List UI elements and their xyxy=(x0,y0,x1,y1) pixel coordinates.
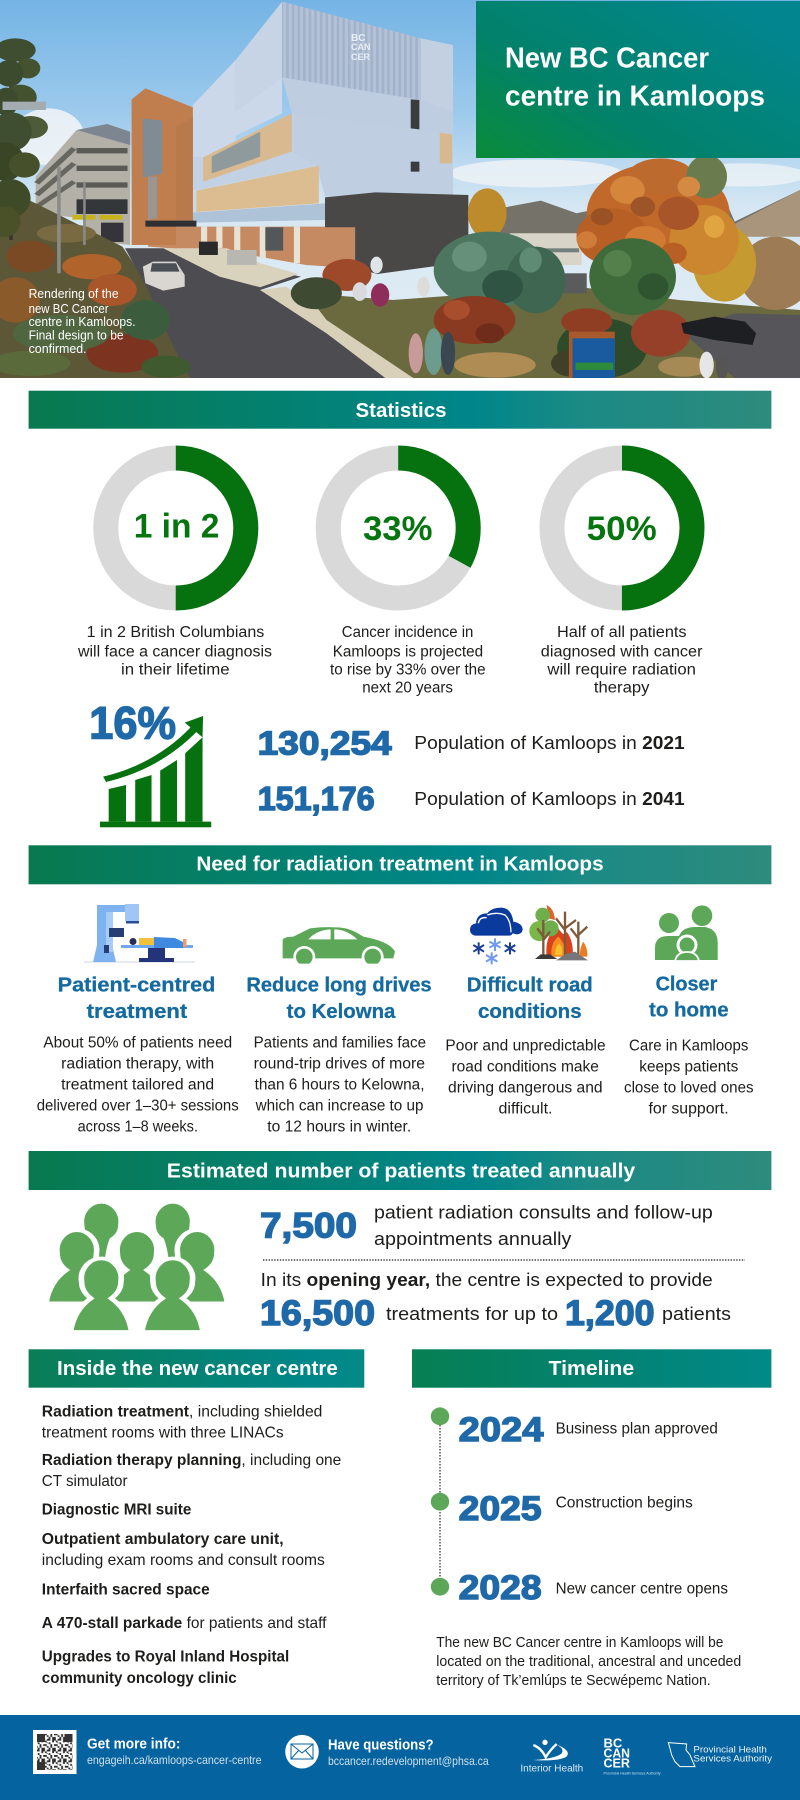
grey parkade building xyxy=(36,124,130,245)
donut: 50%: 50% xyxy=(587,510,657,548)
land acknowledgement: territory of Tk’emlúps te Secwépemc Nation. xyxy=(436,1672,711,1689)
heading: timeline xyxy=(412,1349,771,1388)
heading: estimated patients: Estimated number of patients treated annually xyxy=(167,1159,636,1182)
logo: BC Cancer: CER xyxy=(604,1757,630,1771)
donut: 33% xyxy=(328,458,468,598)
timeline 2024: Business plan approved xyxy=(556,1420,718,1437)
building signage: CER xyxy=(351,52,371,62)
list: facilities: Radiation therapy planning, including one xyxy=(42,1452,341,1469)
column text: closer to home: keeps patients xyxy=(639,1059,739,1076)
donut: 1 in 2 xyxy=(106,458,246,598)
stat: 7,500 consults: 7,500 xyxy=(260,1206,357,1245)
people xyxy=(353,257,728,380)
column text: patient-centred treatment: treatment tailored and xyxy=(61,1077,214,1094)
timeline 2028: New cancer centre opens xyxy=(556,1580,728,1597)
hero photo: rendering of the new cancer centre xyxy=(0,0,800,380)
timeline 2024: 2024 xyxy=(459,1411,543,1449)
photo caption: Rendering of the xyxy=(29,287,119,301)
logo: BC Cancer: BC xyxy=(604,1736,623,1751)
column text: reduce long drives xyxy=(254,1034,426,1136)
opening year sentence: In its opening year, the centre is expected to provide xyxy=(261,1269,713,1290)
logo: BC Cancer: Provincial Health Services Authority xyxy=(604,1772,661,1776)
column text: closer to home: Care in Kamloops xyxy=(629,1038,749,1055)
caption: 33% xyxy=(330,624,486,697)
wayfinding sign xyxy=(569,332,615,378)
icon: group of people xyxy=(46,1202,228,1332)
icon: rising bar chart with arrow xyxy=(100,716,211,827)
heading: statistics: Statistics xyxy=(356,399,446,422)
16% growth figure: 16% xyxy=(89,697,176,748)
heading: need for radiation treatment xyxy=(29,845,771,884)
list: facilities: community oncology clinic xyxy=(42,1670,237,1687)
photo caption: new BC Cancer xyxy=(29,302,109,316)
column heading: closer to home: Closer xyxy=(656,974,718,996)
icon: radiation machine and patient xyxy=(84,904,195,962)
land acknowledgement xyxy=(436,1634,741,1689)
QR code xyxy=(33,1730,76,1774)
list: facilities: Radiation treatment, including shielded xyxy=(42,1404,322,1421)
timeline 2028 xyxy=(459,1569,728,1607)
column text: difficult road conditions xyxy=(445,1038,606,1118)
list: facilities: A 470-stall parkade for patients and staff xyxy=(42,1615,327,1632)
column text: reduce long drives: Patients and families face xyxy=(254,1034,426,1051)
logo: BC Cancer: CAN xyxy=(604,1747,630,1761)
caption: 1 in 2: 1 in 2 British Columbians xyxy=(87,624,265,641)
stat: 7,500 consults: appointments annually xyxy=(374,1228,572,1249)
icon: wildfire xyxy=(529,905,588,960)
stat: 16,500 treatments for 1,200 patients: 16,500 xyxy=(260,1294,375,1333)
photo caption: centre in Kamloops. xyxy=(29,315,136,329)
heading: inside the new cancer centre xyxy=(29,1349,364,1388)
population 2021 xyxy=(258,724,685,761)
column text: patient-centred treatment: radiation therapy, with xyxy=(61,1056,214,1073)
donut: 1 in 2: 1 in 2 xyxy=(134,508,219,546)
stat: 16,500 treatments for 1,200 patients: patients xyxy=(662,1303,731,1324)
caption: 50%: diagnosed with cancer xyxy=(541,644,702,661)
column heading: difficult road conditions: Difficult road xyxy=(467,975,593,997)
photo caption: confirmed. xyxy=(29,342,87,356)
caption: 1 in 2: will face a cancer diagnosis xyxy=(77,644,272,661)
have questions xyxy=(328,1736,489,1768)
caption: 33%: to rise by 33% over the xyxy=(330,662,486,679)
timeline 2025 xyxy=(459,1490,693,1528)
column heading: patient-centred treatment: Patient-centred xyxy=(58,975,215,997)
column text: reduce long drives: than 6 hours to Kelowna, xyxy=(255,1077,424,1094)
icon: car xyxy=(283,927,395,968)
column text: closer to home: for support. xyxy=(648,1101,729,1118)
column heading: closer to home: to home xyxy=(649,1000,729,1022)
logo: Provincial Health Services Authority: Provincial Health xyxy=(693,1745,767,1756)
column heading: reduce long drives: Reduce long drives xyxy=(246,975,432,997)
heading: need for radiation treatment: Need for radiation treatment in Kamloops xyxy=(196,853,604,876)
timeline 2024 xyxy=(459,1411,718,1449)
population 2021: Population of Kamloops in 2021 xyxy=(414,732,685,753)
column heading: reduce long drives xyxy=(246,975,432,1023)
title panel: New BC Cancer xyxy=(505,43,709,75)
building signage xyxy=(351,34,370,60)
column text: patient-centred treatment xyxy=(37,1034,239,1136)
have questions: bccancer.redevelopment@phsa.ca xyxy=(328,1754,489,1768)
column text: patient-centred treatment: About 50% of patients need xyxy=(43,1034,232,1051)
list: facilities: CT simulator xyxy=(42,1473,128,1490)
heading: estimated patients xyxy=(29,1151,771,1190)
get more info: engageih.ca/kamloops-cancer-centre xyxy=(87,1753,262,1767)
cars xyxy=(143,242,756,345)
column heading: difficult road conditions: conditions xyxy=(478,1001,582,1023)
column heading: patient-centred treatment xyxy=(58,975,215,1023)
caption: 50%: therapy xyxy=(594,680,650,697)
have questions: Have questions? xyxy=(328,1736,434,1753)
icon: family xyxy=(655,905,718,961)
list: facilities: Upgrades to Royal Inland Hospital xyxy=(42,1649,289,1666)
building volumes xyxy=(193,2,453,223)
heading: inside the new cancer centre: Inside the new cancer centre xyxy=(57,1357,338,1380)
title panel: centre in Kamloops xyxy=(505,80,765,112)
stat: 16,500 treatments for 1,200 patients: 1,200 xyxy=(565,1294,654,1333)
column text: difficult road conditions: difficult. xyxy=(498,1101,552,1118)
population 2041: Population of Kamloops in 2041 xyxy=(414,788,685,809)
copper tower xyxy=(132,88,196,245)
get more info: Get more info: xyxy=(87,1735,180,1752)
column text: reduce long drives: which can increase to up xyxy=(255,1098,424,1115)
stat: 7,500 consults xyxy=(260,1201,713,1249)
heading: statistics xyxy=(29,391,771,429)
building signage: BC xyxy=(351,33,365,44)
column heading: closer to home xyxy=(649,974,729,1022)
trees and planting xyxy=(0,155,800,378)
column text: closer to home xyxy=(624,1038,754,1118)
population 2041 xyxy=(258,780,685,817)
left pine tree xyxy=(0,38,86,273)
population 2041: 151,176 xyxy=(258,780,375,817)
timeline 2025: Construction begins xyxy=(556,1494,693,1511)
logo: Provincial Health Services Authority xyxy=(668,1743,772,1767)
column text: difficult road conditions: road conditions make xyxy=(452,1059,599,1076)
column text: closer to home: close to loved ones xyxy=(624,1080,754,1097)
stat: 16,500 treatments for 1,200 patients xyxy=(260,1294,731,1333)
column text: difficult road conditions: driving dangerous and xyxy=(448,1080,603,1097)
land acknowledgement: located on the traditional, ancestral and unceded xyxy=(436,1653,741,1670)
caption: 33%: Cancer incidence in xyxy=(342,624,473,641)
column heading: reduce long drives: to Kelowna xyxy=(287,1001,396,1023)
list: facilities: Outpatient ambulatory care unit, xyxy=(42,1531,284,1548)
caption: 1 in 2 xyxy=(77,624,272,679)
land acknowledgement: The new BC Cancer centre in Kamloops will be xyxy=(436,1634,723,1651)
timeline 2028: 2028 xyxy=(459,1569,542,1607)
caption: 33%: next 20 years xyxy=(362,680,453,697)
get more info xyxy=(87,1735,262,1767)
column heading: patient-centred treatment: treatment xyxy=(87,1001,188,1023)
column text: difficult road conditions: Poor and unpredictable xyxy=(445,1038,606,1055)
footer band xyxy=(0,1715,800,1800)
column text: reduce long drives: to 12 hours in winter. xyxy=(267,1119,411,1136)
caption: 50% xyxy=(541,624,702,697)
caption: 50%: will require radiation xyxy=(546,662,696,679)
list: facilities: Interfaith sacred space xyxy=(42,1582,210,1599)
donut: 50% xyxy=(552,458,692,598)
caption: 1 in 2: in their lifetime xyxy=(121,662,230,679)
list: facilities: Diagnostic MRI suite xyxy=(42,1502,191,1519)
photo caption: Final design to be xyxy=(29,328,124,342)
logo: BC Cancer xyxy=(604,1736,661,1776)
caption: 50%: Half of all patients xyxy=(557,624,687,641)
title panel xyxy=(476,1,800,158)
icon: snow cloud xyxy=(470,908,523,964)
list: facilities: treatment rooms with three LINACs xyxy=(42,1425,284,1442)
column heading: difficult road conditions xyxy=(467,975,593,1023)
caption: 33%: Kamloops is projected xyxy=(333,644,483,661)
column text: patient-centred treatment: across 1–8 weeks. xyxy=(78,1119,198,1136)
heading: timeline: Timeline xyxy=(548,1357,634,1380)
list: facilities xyxy=(42,1404,341,1687)
timeline axis and dots xyxy=(431,1407,449,1596)
photo caption xyxy=(29,287,136,356)
list: facilities: including exam rooms and consult rooms xyxy=(42,1552,325,1569)
population 2021: 130,254 xyxy=(258,724,392,761)
stat: 7,500 consults: patient radiation consults and follow-up xyxy=(374,1201,713,1222)
column text: patient-centred treatment: delivered over 1–30+ sessions xyxy=(37,1098,239,1115)
logo: Interior Health: Interior Health xyxy=(520,1763,583,1775)
building signage: CAN xyxy=(351,42,370,52)
icon: email xyxy=(285,1735,319,1768)
column text: reduce long drives: round-trip drives of more xyxy=(254,1056,425,1073)
timeline 2025: 2025 xyxy=(459,1490,542,1528)
logo: Interior Health xyxy=(520,1740,583,1775)
donut: 33%: 33% xyxy=(363,510,432,548)
logo: Provincial Health Services Authority: Services Authority xyxy=(693,1754,772,1765)
stat: 16,500 treatments for 1,200 patients: treatments for up to xyxy=(386,1303,558,1324)
